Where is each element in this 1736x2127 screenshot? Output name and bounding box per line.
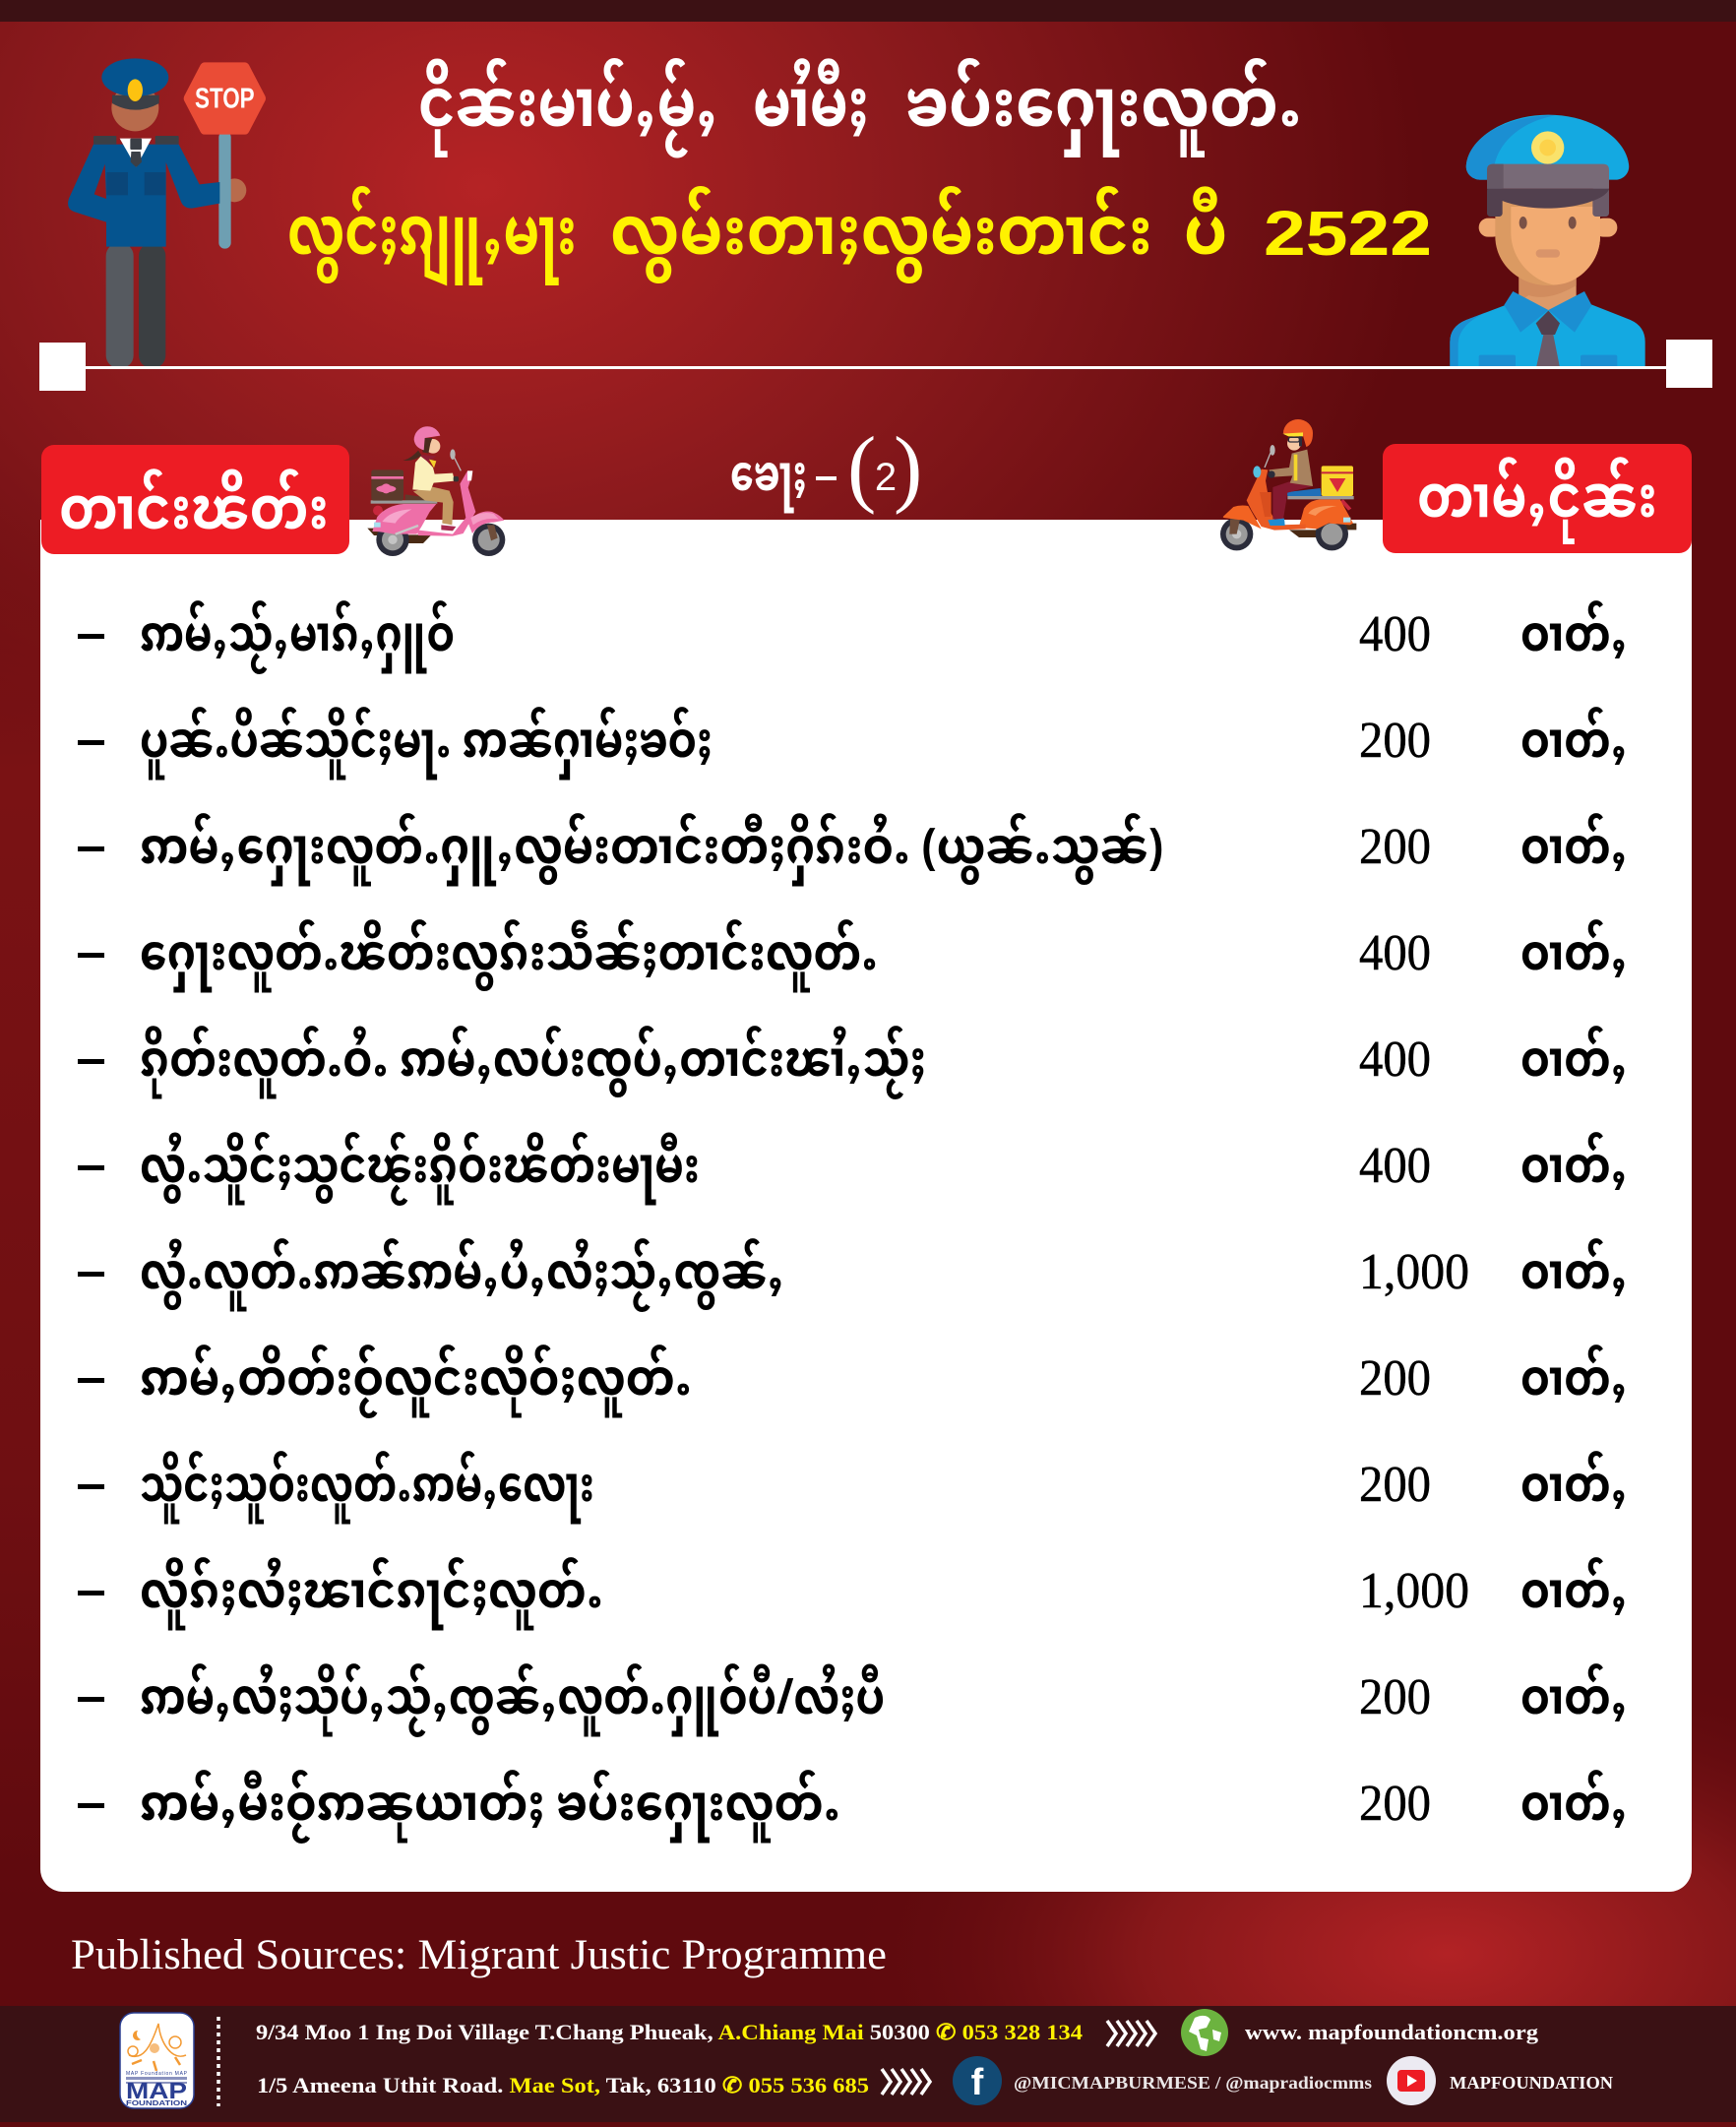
icon: arrows to website	[1107, 2021, 1155, 2046]
title line 2: လွင်ႈၵျူႇမႃး	[287, 166, 577, 312]
section number	[730, 420, 922, 532]
title line 2: ပီ	[1184, 166, 1227, 312]
icon: orange scooter rider	[1220, 419, 1356, 550]
row: 10: လိူၵ်ႈလႆႈၽၢင်ၵႃင်ႈလူတ်ႉ	[140, 1542, 603, 1650]
row: 6: 400	[1359, 1138, 1431, 1194]
row: 10: ဝၢတ်ႇ	[1520, 1542, 1628, 1650]
row: 5: ဝၢတ်ႇ	[1520, 1011, 1628, 1118]
row: 4: ဝၢတ်ႇ	[1520, 905, 1628, 1012]
row: 11: 200	[1359, 1669, 1431, 1725]
website: www. mapfoundationcm.org	[1245, 2020, 1538, 2044]
row: 10: 1,000	[1359, 1563, 1469, 1619]
section number: ၶေႃႈ	[730, 425, 807, 532]
address: Chiang Mai: 9/34 Moo 1 Ing Doi Village T.Chang Phueak, A.Chiang Mai 50300 ✆ 053 328 134	[256, 2020, 1083, 2044]
title line 1: ၶပ်းႁေႃးလူတ်ႉ	[905, 38, 1302, 184]
row: 3: ဝၢတ်ႇ	[1520, 798, 1628, 906]
icon: MAP Foundation logo: MAP Foundation MAP	[126, 2071, 188, 2077]
section number: 2	[875, 456, 897, 499]
row: 12: 200	[1359, 1776, 1431, 1832]
row: 5: ၵိုတ်းလူတ်ႉဝႆႉ ဢမ်ႇလပ်းၸွပ်ႇတၢင်းၽၢႆႇသႂ်ႈ	[140, 1011, 926, 1118]
icon: police officer portrait	[1450, 115, 1645, 367]
row: 8: 200	[1359, 1350, 1431, 1407]
tab: offence heading: တၢင်းၽိတ်း	[59, 451, 329, 580]
row: 9: ဝၢတ်ႇ	[1520, 1436, 1628, 1543]
row: 7	[78, 1223, 1628, 1331]
icon: MAP Foundation logo	[120, 2013, 194, 2108]
dotted separator	[217, 2017, 220, 2106]
row: 2: ဝၢတ်ႇ	[1520, 692, 1628, 799]
icon: MAP Foundation logo: FOUNDATION	[126, 2100, 187, 2107]
row: 9	[78, 1436, 1628, 1543]
row: 2: ပူၼ်ႉပိၼ်သိူင်ႈမႃႉ ဢၼ်ႁၢမ်ႈၶဝ်ႈ	[140, 692, 713, 799]
row: 6	[78, 1117, 1628, 1224]
title line 2	[287, 166, 1432, 312]
icon: traffic policeman with stop sign: STOP	[195, 83, 255, 114]
row: 1: ဢမ်ႇသႂ်ႇမၢၵ်ႇႁူဝ်	[140, 586, 455, 693]
title line 1: မၢႆမီႈ	[753, 38, 869, 184]
panel: fines table	[40, 520, 1692, 1892]
icon: traffic policeman with stop sign	[68, 58, 266, 368]
row: 7: လွႆႉလူတ်ႉဢၼ်ဢမ်ႇပႆႇလႆႈသႂ်ႇၸွၼ်ႇ	[140, 1223, 784, 1331]
row: 3: ဢမ်ႇႁေႃးလူတ်ႉႁူႇလွမ်းတၢင်းတီႈႁိၵ်းဝႆႉ (ယွၼ်ႉသွၼ်)	[140, 798, 1163, 906]
row: 10	[78, 1542, 1628, 1650]
divider with end squares	[39, 340, 1712, 391]
row: 4: ႁေႃးလူတ်ႉၽိတ်းလွၵ်းသဵၼ်ႈတၢင်းလူတ်ႉ	[140, 905, 878, 1012]
row: 9: သိူင်ႈသူဝ်းလူတ်ႉဢမ်ႇလေႃး	[140, 1436, 594, 1543]
row: 11: ဢမ်ႇလႆႈသိုပ်ႇသႂ်ႇၸွၼ်ႇလူတ်ႉႁူဝ်ပီ/လႆႈပီ	[140, 1649, 885, 1756]
icon: globe	[1181, 2009, 1228, 2056]
row: 4: 400	[1359, 925, 1431, 981]
row: 9: 200	[1359, 1457, 1431, 1513]
row: 5: 400	[1359, 1032, 1431, 1088]
row: 6: လွႆႉသိူင်ႈသွင်ၽႂ်းၵိူဝ်းၽိတ်းမႃမီး	[140, 1117, 700, 1224]
row: 6: ဝၢတ်ႇ	[1520, 1117, 1628, 1224]
icon: facebook	[953, 2056, 1002, 2105]
row: 5	[78, 1011, 1628, 1118]
row: 1: 400	[1359, 606, 1431, 662]
title line 2: 2522	[1264, 198, 1432, 269]
top band	[0, 0, 1736, 22]
social handles: @MICMAPBURMESE / @mapradiocmms	[1014, 2073, 1372, 2093]
row: 2	[78, 692, 1628, 799]
section number: )	[894, 420, 922, 516]
youtube channel: MAPFOUNDATION	[1450, 2073, 1613, 2093]
icon: MAP Foundation logo: MAP	[126, 2078, 187, 2103]
source credit: Published Sources: Migrant Justic Programme	[71, 1932, 887, 1978]
row: 3: 200	[1359, 819, 1431, 875]
row: 2: 200	[1359, 713, 1431, 769]
icon: pink scooter rider	[367, 426, 505, 556]
title line 2: လွမ်းတၢႈလွမ်းတၢင်း	[610, 166, 1152, 312]
section number: (	[847, 420, 876, 516]
address: Mae Sot: 1/5 Ameena Uthit Road. Mae Sot, Tak, 63110 ✆ 055 536 685	[257, 2073, 869, 2097]
row: 4	[78, 905, 1628, 1012]
icon: facebook: f	[971, 2062, 984, 2103]
tab: fine amount heading: တၢမ်ႇငိုၼ်း	[1417, 439, 1657, 568]
row: 12: ဝၢတ်ႇ	[1520, 1755, 1628, 1862]
row: 8: ဝၢတ်ႇ	[1520, 1330, 1628, 1437]
row: 1	[78, 586, 1628, 693]
row: 12	[78, 1755, 1628, 1862]
row: 1: ဝၢတ်ႇ	[1520, 586, 1628, 693]
title line 1: ငိုၼ်းမၢပ်ႇမႂ်ႇ	[418, 38, 718, 184]
row: 7: 1,000	[1359, 1244, 1469, 1300]
title line 1	[418, 38, 1302, 184]
footer band	[0, 2006, 1736, 2122]
row: 8	[78, 1330, 1628, 1437]
row: 11: ဝၢတ်ႇ	[1520, 1649, 1628, 1756]
row: 12: ဢမ်ႇမီးဝႂ်ဢၼုယၢတ်ႈ ၶပ်းႁေႃးလူတ်ႉ	[140, 1755, 840, 1862]
row: 8: ဢမ်ႇတိတ်းဝႂ်လူင်းလိုဝ်ႈလူတ်ႉ	[140, 1330, 692, 1437]
row: 11	[78, 1649, 1628, 1756]
icon: arrows to facebook	[882, 2069, 930, 2095]
row: 7: ဝၢတ်ႇ	[1520, 1223, 1628, 1331]
icon: youtube	[1387, 2056, 1436, 2105]
